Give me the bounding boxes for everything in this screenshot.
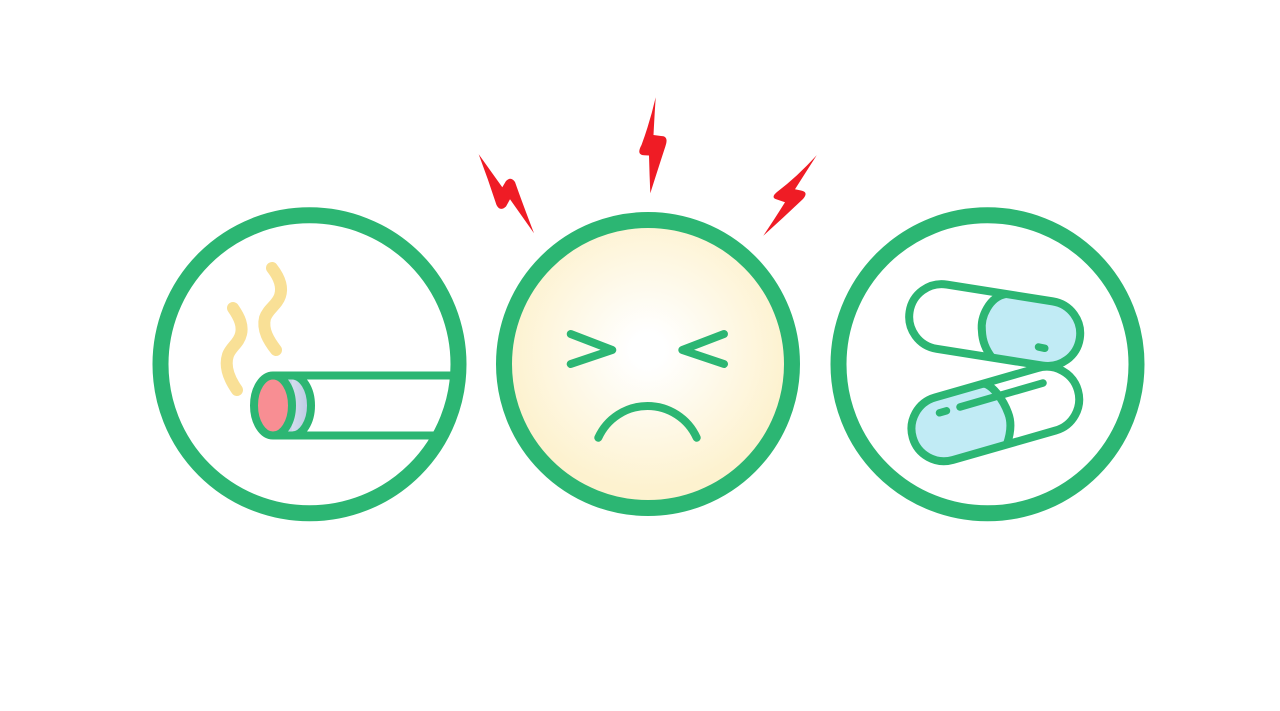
- panel: pills: [838, 215, 1136, 513]
- panel: cigarette: [160, 215, 470, 513]
- icon: squeezed eyes: [571, 334, 724, 364]
- icon: lower capsule: [904, 359, 1087, 469]
- icon: upper capsule: [905, 280, 1085, 371]
- icon: upper capsule highlight: [1038, 347, 1045, 348]
- bolt: right: [763, 155, 817, 236]
- circle face: [504, 220, 792, 508]
- icon: lightning bolts: [479, 97, 817, 236]
- icon: smoke wisps: [227, 268, 281, 390]
- icon: frowning mouth: [598, 406, 697, 438]
- panel: headache face: [504, 220, 792, 508]
- bolt: centre: [639, 97, 667, 193]
- circle outline: pills: [838, 215, 1136, 513]
- icon: cigarette: [254, 376, 470, 436]
- icon: lower capsule highlights: [940, 383, 1043, 413]
- circle outline: cigarette: [160, 215, 458, 513]
- bolt: left: [479, 154, 534, 233]
